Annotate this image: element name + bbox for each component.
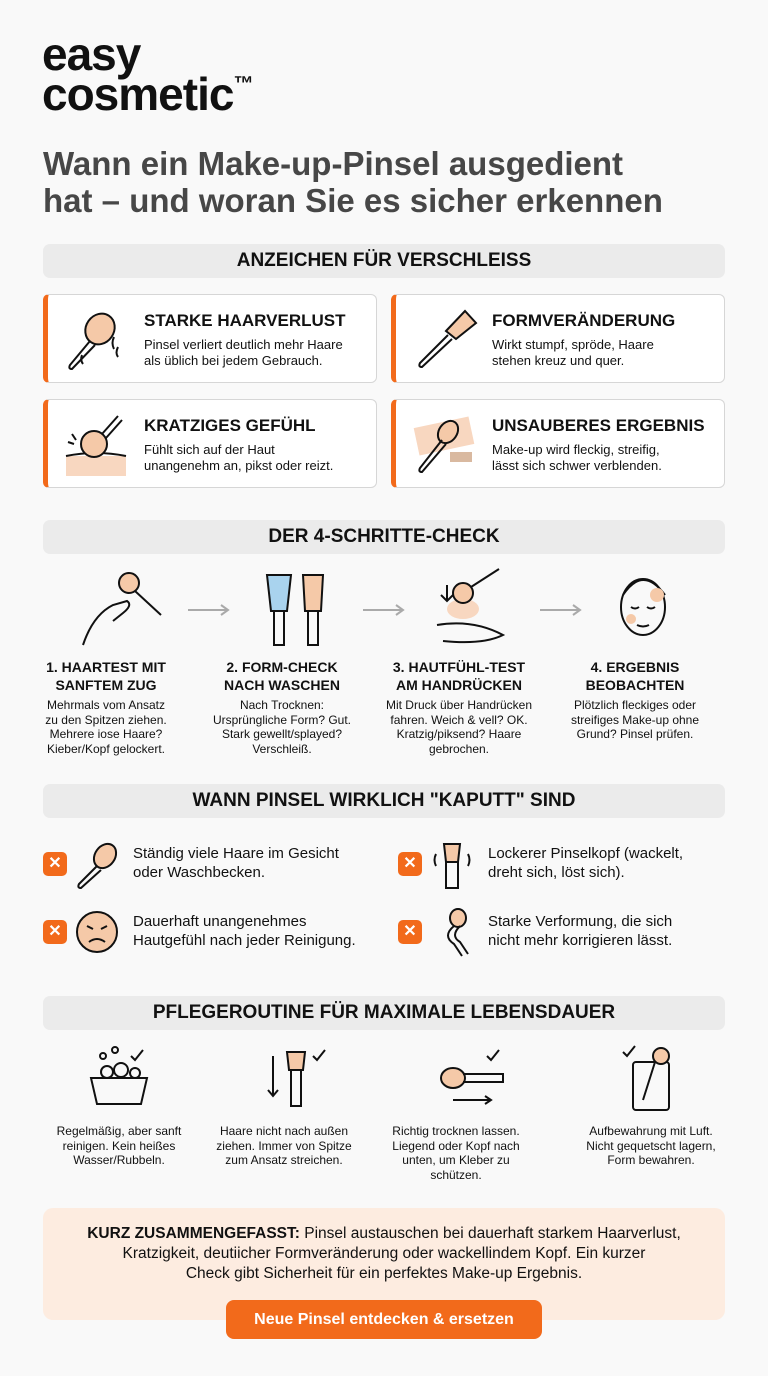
- icons: care: [90, 1045, 670, 1111]
- logo: easy: [42, 28, 140, 80]
- step 4: 4. ERGEBNIS: [591, 659, 679, 675]
- step 2: Nach Trocknen:: [240, 698, 324, 712]
- care 2: Haare nicht nach außen: [220, 1124, 348, 1138]
- item 4: ✕: [403, 923, 417, 940]
- card: Unsauberes Ergebnis: Make-up wird fleckig, streifig,: [492, 442, 660, 457]
- item 4: [398, 908, 672, 956]
- icons: steps: [82, 568, 666, 646]
- step 4: [571, 659, 699, 741]
- step 1: 1. HAARTEST MIT: [46, 659, 166, 675]
- card: Kratziges Gefühl: Fühlt sich auf der Haut: [144, 442, 275, 457]
- item 1: oder Waschbecken.: [133, 864, 265, 881]
- step 1: SANFTEM ZUG: [55, 677, 157, 693]
- item 2: dreht sich, löst sich).: [488, 864, 625, 881]
- care 3: schützen.: [430, 1168, 482, 1182]
- care 4: Nicht gequetscht lagern,: [586, 1138, 716, 1152]
- step 3: gebrochen.: [429, 742, 489, 756]
- heading: Anzeichen: [43, 244, 725, 278]
- step 1: zu den Spitzen ziehen.: [45, 712, 167, 726]
- heading: kaputt: WANN PINSEL WIRKLICH "KAPUTT" SIND: [193, 790, 575, 811]
- card: Kratziges Gefühl: [43, 399, 377, 488]
- care 1: Wasser/Rubbeln.: [73, 1153, 165, 1167]
- title: Wann ein Make-up-Pinsel ausgedient: [43, 145, 623, 182]
- card: Unsauberes Ergebnis: UNSAUBERES ERGEBNIS: [492, 416, 705, 435]
- care 3: unten, um Kleber zu: [402, 1153, 510, 1167]
- step 4: Grund? Pinsel prüfen.: [577, 727, 693, 741]
- care 3: Richtig trocknen lassen.: [392, 1124, 520, 1138]
- summary box: Check gibt Sicherheit für ein perfektes Make-up Ergebnis.: [186, 1265, 582, 1282]
- step 4: BEOBACHTEN: [586, 677, 684, 693]
- card: Haarverlust: STARKE HAARVERLUST: [144, 311, 346, 330]
- step 3: 3. HAUTFÜHL-TEST: [393, 659, 525, 675]
- care 1: [57, 1124, 182, 1167]
- item 2: ✕: [403, 855, 417, 872]
- item 4: nicht mehr korrigieren lässt.: [488, 932, 672, 949]
- summary box: KURZ ZUSAMMENGEFASST: Pinsel austauschen bei dauerhaft starkem Haarverlust,: [87, 1225, 681, 1242]
- button: Neue Pinsel entdecken & ersetzen: [254, 1311, 514, 1328]
- step 1: Mehrere iose Haare?: [50, 727, 162, 741]
- title: hat – und woran Sie es sicher erkennen: [43, 182, 663, 219]
- item 1: [43, 842, 339, 889]
- card: Haarverlust: Pinsel verliert deutlich mehr Haare: [144, 337, 343, 352]
- item 3: Dauerhaft unangenehmes: [133, 913, 306, 930]
- heading: 4-Schritte-Check: [43, 520, 725, 554]
- care 1: Regelmäßig, aber sanft: [57, 1124, 181, 1138]
- care 2: ziehen. Immer von Spitze: [216, 1138, 352, 1152]
- care 3: [392, 1124, 520, 1182]
- card: Kratziges Gefühl: unangenehm an, pikst oder reizt.: [144, 458, 333, 473]
- step 2: NACH WASCHEN: [224, 677, 340, 693]
- step 2: 2. FORM-CHECK: [226, 659, 338, 675]
- card: Haarverlust: als üblich bei jedem Gebrauch.: [144, 353, 322, 368]
- care 2: zum Ansatz streichen.: [225, 1153, 343, 1167]
- summary box: Kratzigkeit, deutiicher Formveränderung oder wackellindem Kopf. Ein kurzer: [123, 1245, 645, 1262]
- card: Formveränderung: [391, 294, 725, 383]
- step 2: [213, 659, 351, 756]
- item 3: Hautgefühl nach jeder Reinigung.: [133, 932, 356, 949]
- care 4: [586, 1124, 716, 1167]
- item 2: Lockerer Pinselkopf (wackelt,: [488, 845, 683, 862]
- logo: [42, 28, 252, 120]
- step 4: streifiges Make-up ohne: [571, 712, 699, 726]
- step 1: Kieber/Kopf gelockert.: [47, 742, 165, 756]
- logo: cosmetic™: [42, 68, 252, 120]
- step 1: Mehrmals vom Ansatz: [47, 698, 165, 712]
- card: Haarverlust: [43, 294, 377, 383]
- step 3: [386, 659, 532, 756]
- item 4: Starke Verformung, die sich: [488, 913, 672, 930]
- step 3: Kratzig/piksend? Haare: [397, 727, 521, 741]
- step 2: Ursprüngliche Form? Gut.: [213, 712, 351, 726]
- item 1: Ständig viele Haare im Gesicht: [133, 845, 339, 862]
- step 2: Stark gewellt/splayed?: [222, 727, 342, 741]
- card: Kratziges Gefühl: KRATZIGES GEFÜHL: [144, 416, 316, 435]
- care 2: [216, 1124, 352, 1167]
- card: Unsauberes Ergebnis: lässt sich schwer verblenden.: [492, 458, 662, 473]
- step 1: [45, 659, 167, 756]
- heading: Anzeichen: ANZEICHEN FÜR VERSCHLEISS: [237, 250, 531, 271]
- heading: Pflegeroutine: PFLEGEROUTINE FÜR MAXIMALE LEBENSDAUER: [153, 1002, 615, 1023]
- step 3: Mit Druck über Handrücken: [386, 698, 532, 712]
- care 4: Form bewahren.: [607, 1153, 695, 1167]
- item 3: ✕: [48, 923, 62, 940]
- step 2: Verschleiß.: [252, 742, 312, 756]
- care 3: Liegend oder Kopf nach: [392, 1138, 520, 1152]
- item 1: ✕: [48, 855, 62, 872]
- step 3: AM HANDRÜCKEN: [396, 677, 522, 693]
- heading: 4-Schritte-Check: DER 4-SCHRITTE-CHECK: [268, 526, 500, 547]
- step 3: fahren. Weich & vell? OK.: [390, 712, 528, 726]
- item 2: [398, 843, 683, 889]
- care 1: reinigen. Kein heißes: [63, 1138, 175, 1152]
- button: [226, 1300, 542, 1339]
- card: Unsauberes Ergebnis: [391, 399, 725, 488]
- heading: kaputt: [43, 784, 725, 818]
- card: Formveränderung: Wirkt stumpf, spröde, Haare: [492, 337, 654, 352]
- card: Formveränderung: stehen kreuz und quer.: [492, 353, 624, 368]
- item 3: [43, 911, 356, 953]
- title: [43, 145, 663, 219]
- step 4: Plötzlich fleckiges oder: [574, 698, 696, 712]
- heading: Pflegeroutine: [43, 996, 725, 1030]
- card: Formveränderung: FORMVERÄNDERUNG: [492, 311, 675, 330]
- care 4: Aufbewahrung mit Luft.: [589, 1124, 713, 1138]
- summary box: [43, 1208, 725, 1320]
